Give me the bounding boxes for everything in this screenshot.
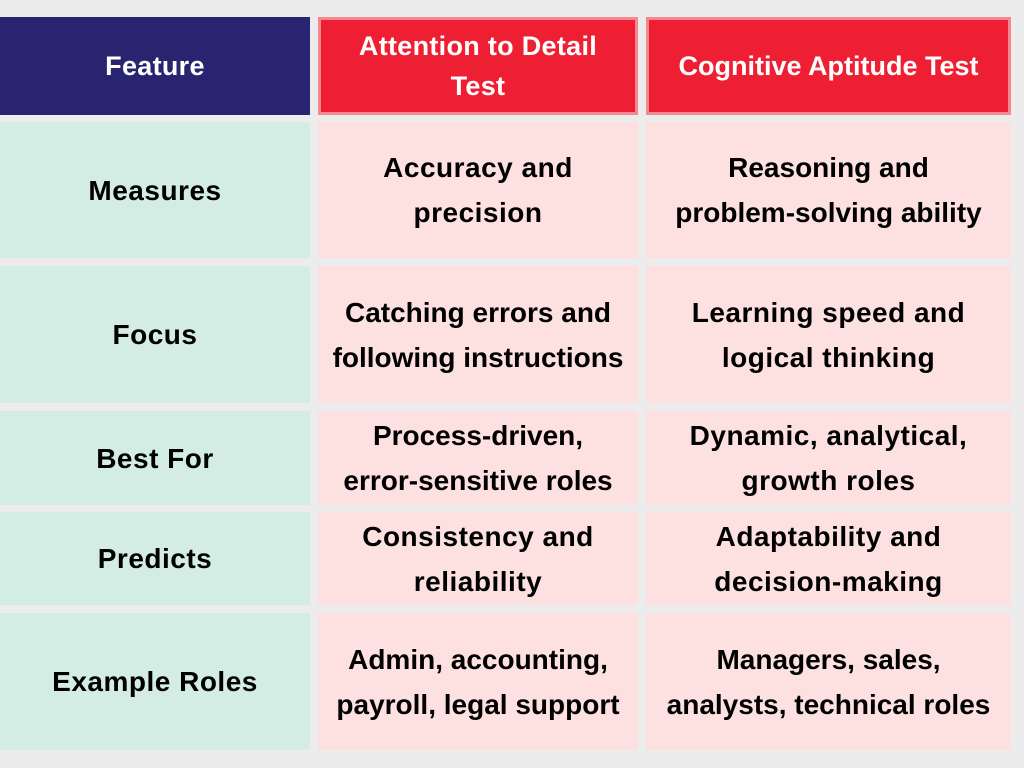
cell: predicts attention: Consistency and <box>362 520 594 552</box>
cell: best for attention: Process-driven, <box>373 420 583 451</box>
header: attention to detail test: Test <box>451 71 505 101</box>
cell: predicts cognitive: Adaptability and <box>716 520 941 552</box>
row label: focus <box>0 266 310 403</box>
cell: measures cognitive <box>646 122 1011 258</box>
header: feature <box>0 17 310 115</box>
header: feature: Feature <box>105 51 205 81</box>
cell: focus attention <box>318 266 638 403</box>
cell: best for cognitive: Dynamic, analytical, <box>690 420 967 451</box>
cell: predicts attention <box>318 512 638 605</box>
cell: best for cognitive <box>646 411 1011 505</box>
cell: best for attention: error-sensitive roles <box>343 465 613 496</box>
cell: measures cognitive: Reasoning and <box>728 152 929 183</box>
cell: example roles cognitive: analysts, technical roles <box>667 688 990 720</box>
cell: measures attention: Accuracy and <box>383 152 573 183</box>
cell: best for cognitive: growth roles <box>741 465 916 496</box>
cell: example roles attention: Admin, accounting, <box>348 644 608 674</box>
row label: example roles: Example Roles <box>52 666 258 697</box>
cell: best for attention <box>318 411 638 505</box>
row label: measures <box>0 122 310 258</box>
row label: best for <box>0 411 310 505</box>
cell: focus cognitive: logical thinking <box>722 342 935 372</box>
cell: predicts cognitive: decision-making <box>714 566 943 596</box>
cell: focus cognitive <box>646 266 1011 403</box>
header: cognitive aptitude test <box>646 17 1011 115</box>
row label: best for: Best For <box>96 442 214 474</box>
row label: example roles <box>0 613 310 750</box>
cell: example roles cognitive: Managers, sales, <box>716 644 941 674</box>
cell: example roles cognitive <box>646 613 1011 750</box>
cell: predicts attention: reliability <box>414 566 542 596</box>
cell: measures attention: precision <box>414 197 542 228</box>
cell: focus cognitive: Learning speed and <box>692 296 965 328</box>
cell: predicts cognitive <box>646 512 1011 605</box>
row label: predicts <box>0 512 310 605</box>
header: cognitive aptitude test: Cognitive Aptitude Test <box>678 51 978 81</box>
cell: measures cognitive: problem-solving ability <box>675 197 982 228</box>
cell: focus attention: following instructions <box>333 342 623 372</box>
row label: measures: Measures <box>88 174 222 206</box>
cell: example roles attention <box>318 613 638 750</box>
cell: measures attention <box>318 122 638 258</box>
header: attention to detail test: Attention to Detail <box>359 31 597 61</box>
row label: focus: Focus <box>113 319 197 350</box>
row label: predicts: Predicts <box>98 543 212 574</box>
cell: focus attention: Catching errors and <box>345 296 611 328</box>
cell: example roles attention: payroll, legal support <box>336 688 620 720</box>
header: attention to detail test <box>318 17 638 115</box>
